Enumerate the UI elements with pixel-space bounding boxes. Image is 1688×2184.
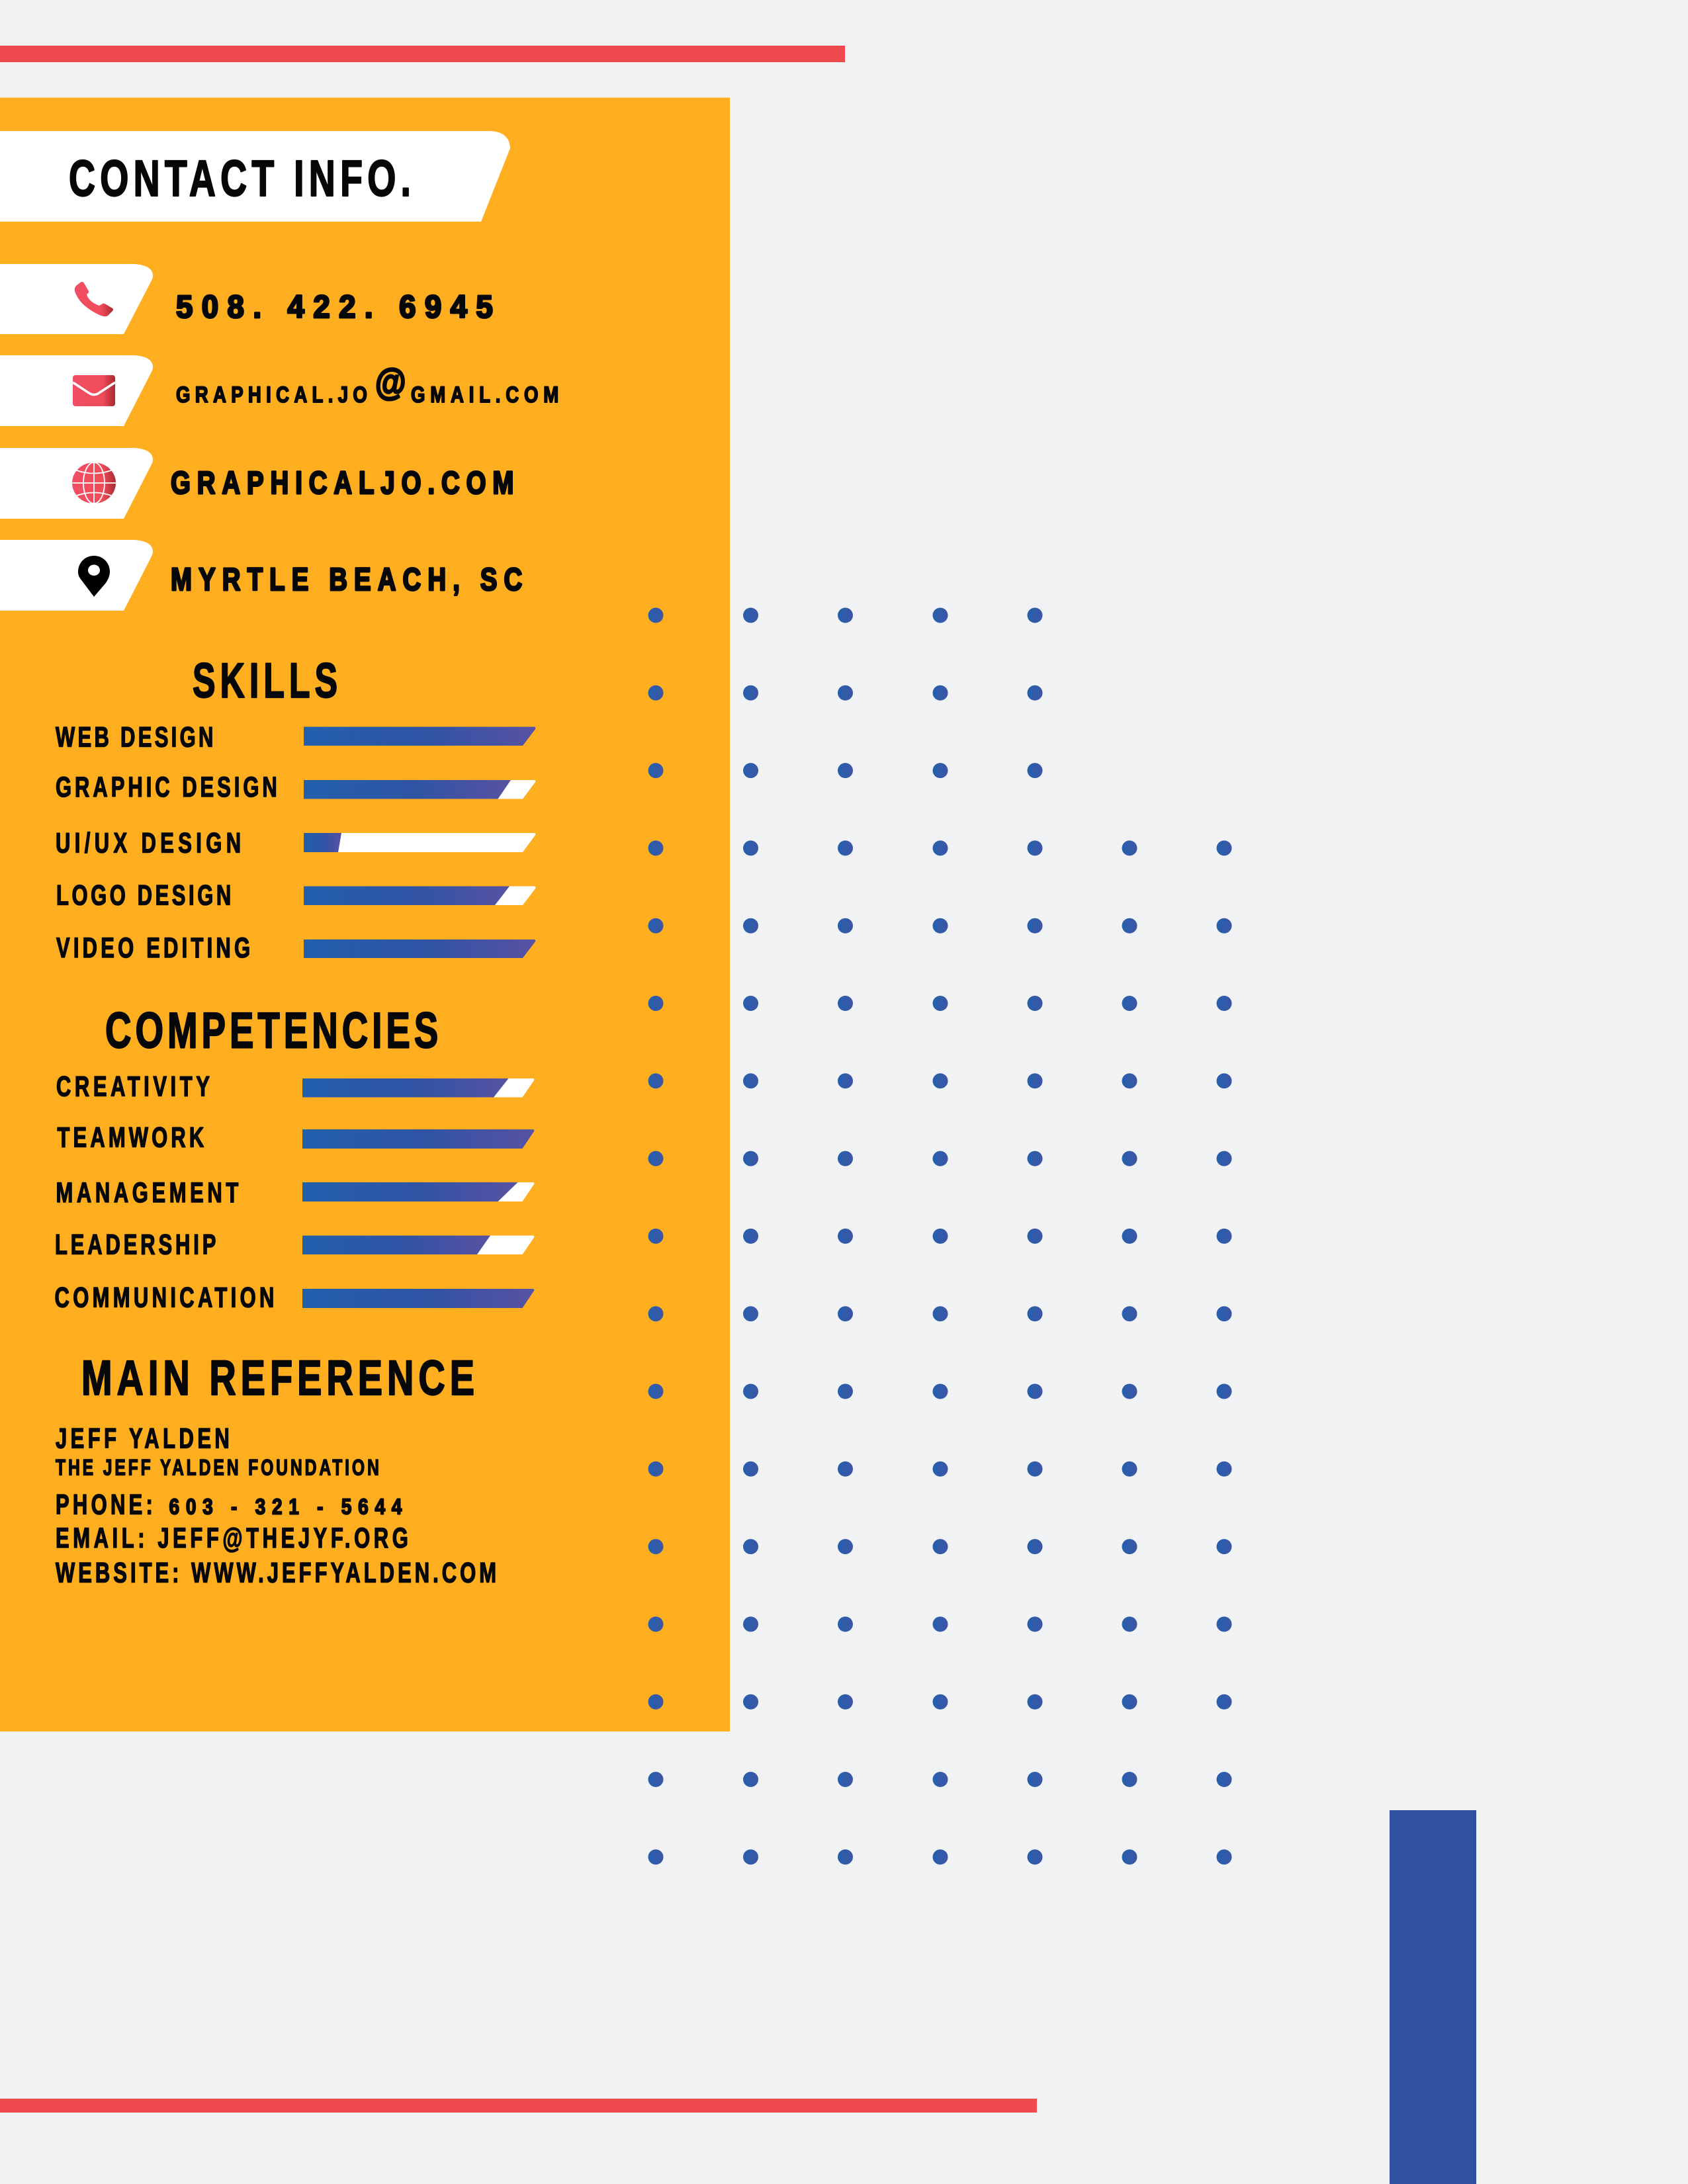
competency: leadership: LEADERSHIP bbox=[55, 1228, 216, 1260]
website tab bbox=[0, 448, 153, 519]
website url: GRAPHICALJO.COM bbox=[171, 466, 513, 501]
competency: teamwork bbox=[57, 1121, 534, 1153]
location tab bbox=[0, 540, 153, 611]
email row bbox=[0, 355, 558, 426]
website row bbox=[0, 448, 513, 519]
skill: graphic design bbox=[56, 771, 535, 803]
reference phone: PHONE: bbox=[56, 1488, 153, 1520]
competency: teamwork: TEAMWORK bbox=[57, 1121, 204, 1153]
main reference section bbox=[56, 1350, 496, 1589]
location text: MYRTLE BEACH, SC bbox=[171, 562, 522, 597]
skill: ui/ux design bbox=[56, 826, 535, 859]
email address: @ bbox=[375, 361, 406, 403]
skill: ui/ux design: UI/UX DESIGN bbox=[56, 826, 241, 859]
email tab bbox=[0, 355, 153, 426]
skill: logo design bbox=[56, 879, 535, 911]
location row bbox=[0, 540, 522, 611]
icon: globe bbox=[72, 462, 116, 503]
icon: map pin bbox=[78, 556, 110, 597]
skills section bbox=[56, 653, 535, 963]
top red bar bbox=[0, 46, 845, 62]
skill: web design: WEB DESIGN bbox=[56, 721, 213, 753]
contact info heading tab bbox=[0, 131, 510, 222]
phone row bbox=[0, 264, 493, 334]
reference phone bbox=[56, 1488, 402, 1520]
competency: creativity: CREATIVITY bbox=[56, 1070, 210, 1102]
main reference heading: MAIN REFERENCE bbox=[81, 1350, 474, 1405]
competency: communication bbox=[54, 1281, 534, 1313]
skill: graphic design: GRAPHIC DESIGN bbox=[56, 771, 277, 803]
competency: creativity bbox=[56, 1070, 534, 1102]
skill: logo design: LOGO DESIGN bbox=[56, 879, 231, 911]
email address: GRAPHICAL.JO bbox=[176, 382, 367, 408]
icon: envelope bbox=[73, 375, 115, 406]
competency: communication: COMMUNICATION bbox=[54, 1281, 274, 1313]
competencies section bbox=[54, 1003, 534, 1313]
email address: GMAIL.COM bbox=[411, 382, 558, 408]
icon: phone bbox=[75, 282, 113, 316]
reference email: EMAIL: JEFF@THEJYF.ORG bbox=[56, 1522, 408, 1553]
competency: leadership bbox=[55, 1228, 534, 1260]
contact info heading tab: CONTACT INFO. bbox=[69, 150, 411, 207]
skills heading: SKILLS bbox=[193, 653, 337, 708]
reference organisation: THE JEFF YALDEN FOUNDATION bbox=[56, 1456, 379, 1481]
reference phone: 603 - 321 - 5644 bbox=[169, 1495, 402, 1519]
email address bbox=[176, 361, 558, 408]
reference website: WEBSITE: WWW.JEFFYALDEN.COM bbox=[56, 1556, 496, 1589]
competency: management bbox=[56, 1176, 534, 1208]
competencies heading: COMPETENCIES bbox=[105, 1003, 438, 1059]
competency: management: MANAGEMENT bbox=[56, 1176, 238, 1208]
skill: video editing: VIDEO EDITING bbox=[56, 932, 250, 963]
reference name: JEFF YALDEN bbox=[56, 1422, 230, 1454]
dot grid bbox=[648, 607, 1232, 1864]
skill: web design bbox=[56, 721, 535, 753]
phone number: 508. 422. 6945 bbox=[176, 289, 493, 324]
bottom red bar bbox=[0, 2099, 1037, 2113]
blue rectangle bbox=[1390, 1810, 1476, 2184]
phone tab bbox=[0, 264, 153, 334]
skill: video editing bbox=[56, 932, 535, 963]
panel: yellow resume sidebar bbox=[0, 98, 730, 1731]
